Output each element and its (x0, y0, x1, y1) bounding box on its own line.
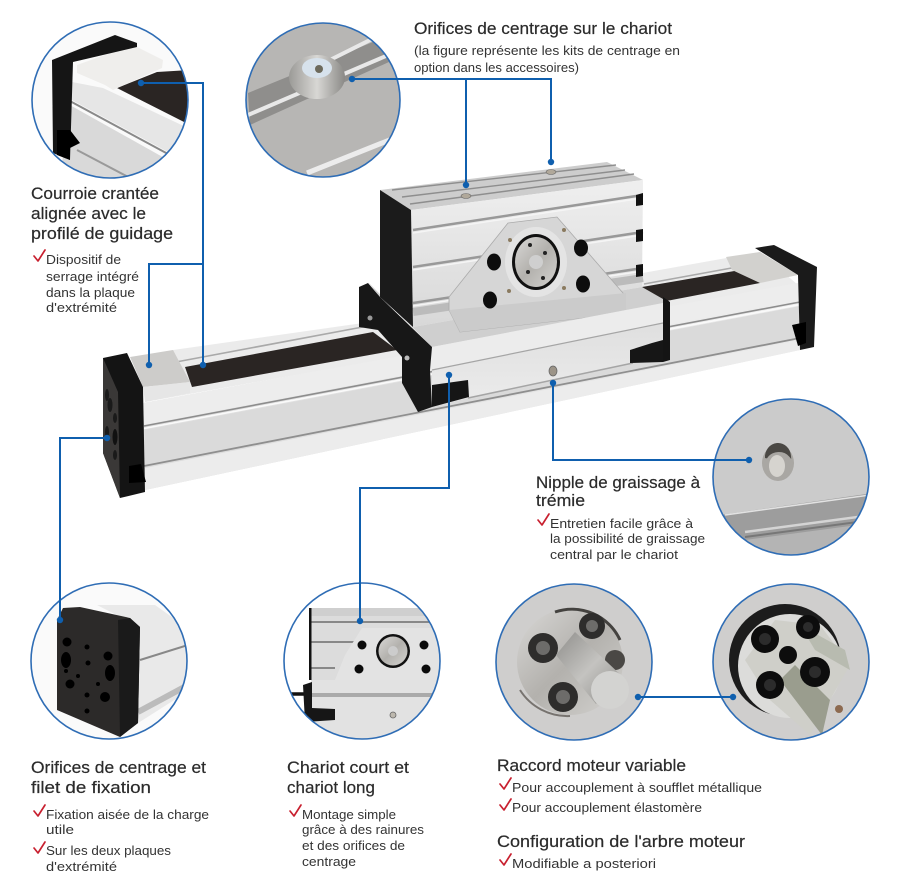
text: toothed belt: Dispositif de (46, 252, 121, 267)
text: motor connection: Pour accouplement à soufflet métallique (512, 780, 762, 795)
text: end plate orifices (31, 759, 209, 874)
text: toothed belt: profilé de guidage (31, 225, 173, 243)
text: motor connection (497, 757, 762, 871)
leader lines: centering orifices (349, 76, 554, 188)
text: centering orifices (414, 20, 680, 75)
text: short and long carriage: chariot long (287, 779, 375, 797)
text: centering orifices: option dans les accessoires) (414, 60, 579, 75)
detail circle: motor coupling with metal bellows (496, 584, 652, 740)
text: grease nipple (536, 474, 705, 562)
text: end plate orifices: d'extrémité (46, 859, 117, 874)
circle outlines (31, 22, 869, 740)
motor plate (449, 217, 626, 332)
leader lines: carriage (357, 372, 452, 624)
text: grease nipple: la possibilité de graissage (550, 531, 705, 546)
text: short and long carriage: Chariot court et (287, 759, 409, 777)
text: grease nipple: Entretien facile grâce à (550, 516, 694, 531)
text: short and long carriage: et des orifices de (302, 838, 405, 853)
text: end plate orifices: filet de fixation (31, 779, 151, 797)
product photo: linear axis with carriage (103, 162, 817, 498)
text: toothed belt: serrage intégré (46, 269, 139, 284)
text: centering orifices: (la figure représente les kits de centrage en (414, 43, 680, 58)
text: short and long carriage (287, 759, 424, 869)
text: end plate orifices: Orifices de centrage et (31, 759, 206, 777)
detail circle: motor coupling elastomer (714, 584, 868, 740)
leader lines: toothed belt (138, 80, 206, 368)
text: toothed belt: dans la plaque (46, 285, 135, 300)
text: end plate orifices: utile (46, 822, 74, 837)
leader lines: grease nipple (550, 380, 752, 463)
leader line: motor coupling (635, 694, 736, 700)
text: grease nipple: trémie (536, 492, 585, 510)
text: toothed belt: d'extrémité (46, 300, 117, 315)
text: end plate orifices: Sur les deux plaques (46, 843, 171, 858)
text: short and long carriage: Montage simple (302, 807, 396, 822)
text: end plate orifices: Fixation aisée de la charge (46, 807, 209, 822)
detail circle: short and long carriage (292, 608, 440, 738)
text: motor connection: Raccord moteur variable (497, 757, 686, 775)
text: toothed belt: Courroie crantée (31, 185, 159, 203)
carriage top and block (368, 282, 670, 347)
detail circle: end plate with fixing threads (57, 605, 186, 737)
text: grease nipple: central par le chariot (550, 547, 678, 562)
text: motor connection: Pour accouplement élastomère (512, 800, 702, 815)
text: short and long carriage: grâce à des rainures (302, 822, 424, 837)
text: toothed belt (31, 185, 173, 315)
text: motor connection: Modifiable a posteriori (512, 856, 656, 871)
text: short and long carriage: centrage (302, 854, 356, 869)
leader lines: end plate (57, 435, 110, 623)
text: grease nipple: Nipple de graissage à (536, 474, 701, 492)
text: motor connection: Configuration de l'arbre moteur (497, 833, 746, 851)
detail circle: centering orifices (246, 24, 400, 176)
text: toothed belt: alignée avec le (31, 205, 146, 223)
text: centering orifices: Orifices de centrage sur le chariot (414, 20, 672, 38)
detail circle: grease nipple (714, 400, 868, 554)
detail circle: toothed belt (52, 35, 188, 178)
carriage front (432, 303, 670, 407)
